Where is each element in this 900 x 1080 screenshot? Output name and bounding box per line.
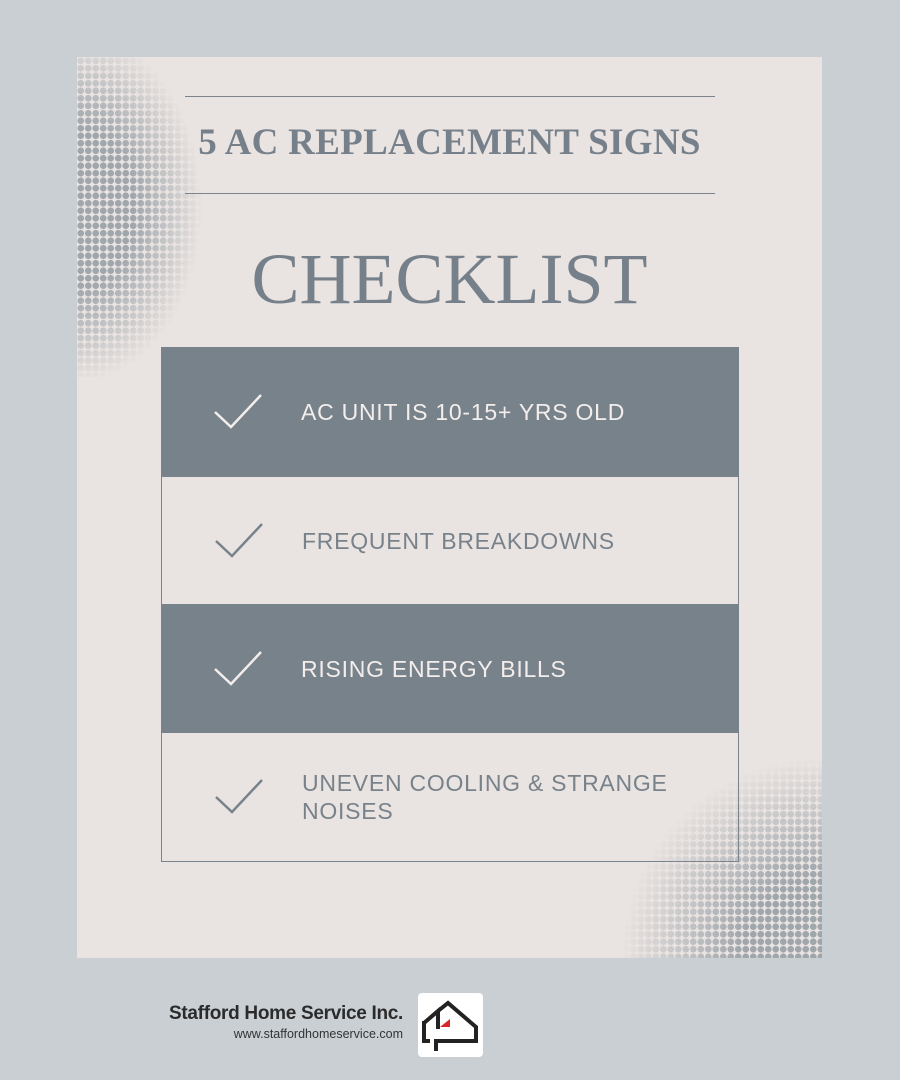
card [77, 57, 822, 958]
footer company [169, 1003, 403, 1041]
row 3 [161, 604, 739, 733]
row 1: AC UNIT IS 10-15+ YRS OLD [301, 398, 625, 424]
footer company: www.staffordhomeservice.com [234, 1027, 403, 1041]
footer company: Stafford Home Service Inc. [169, 1003, 403, 1024]
logo [418, 993, 483, 1057]
row 4 [161, 733, 739, 862]
row 4: NOISES [302, 798, 393, 824]
row 2 [161, 476, 739, 605]
title: CHECKLIST [252, 239, 648, 319]
row 2: FREQUENT BREAKDOWNS [302, 528, 615, 554]
row 3: RISING ENERGY BILLS [301, 656, 567, 682]
subtitle: 5 AC REPLACEMENT SIGNS [198, 122, 701, 163]
row 4: UNEVEN COOLING & STRANGE [302, 770, 668, 796]
row 1 [161, 347, 739, 476]
